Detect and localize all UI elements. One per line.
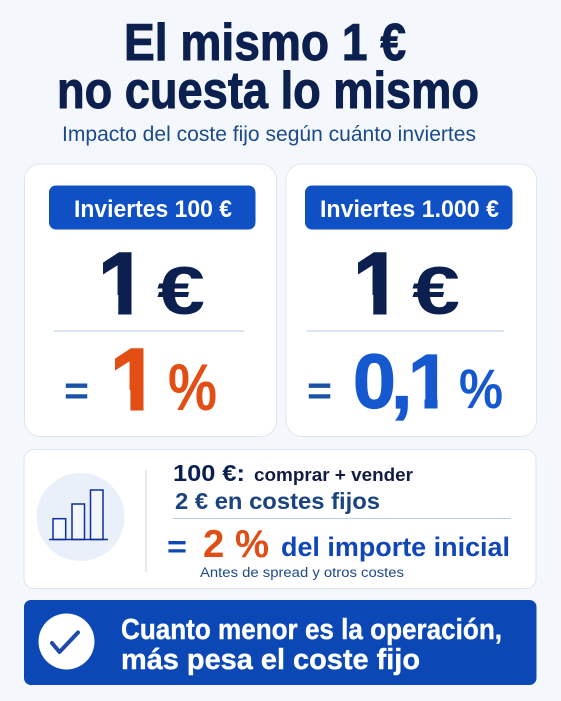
- result: 1 percent: [66, 348, 216, 410]
- title: no cuesta lo mismo: [57, 62, 479, 120]
- badge: invest 1000: [305, 186, 512, 230]
- badge: invest 1000: Inviertes 1.000 €: [320, 196, 499, 223]
- panel: invest 1000: [286, 164, 536, 436]
- text: 100 euros buy and sell: [173, 460, 413, 486]
- result: 1 percent: %: [168, 350, 217, 424]
- amount: 1 euro: 1: [353, 234, 402, 333]
- banner text: [121, 614, 502, 676]
- footnote: Antes de spread y otros costes: [200, 565, 404, 580]
- result: 2 percent of initial amount: del importe inicial: [281, 532, 510, 562]
- amount: 1 euro: [358, 252, 458, 314]
- result: 1 percent: 1: [110, 330, 159, 429]
- panel: invest 100: [24, 164, 276, 436]
- amount: 1 euro: [103, 252, 204, 314]
- banner: conclusion: [24, 600, 536, 685]
- panel: example: [24, 450, 536, 588]
- badge: invest 100: Inviertes 100 €: [74, 196, 232, 223]
- result: 2 percent of initial amount: [167, 523, 510, 566]
- banner text: Cuanto menor es la operación,: [121, 614, 502, 646]
- badge: invest 100: [49, 186, 256, 230]
- title: El mismo 1 €: [124, 14, 406, 72]
- result: 1 percent: =: [64, 369, 89, 413]
- amount: 1 euro: 1: [98, 234, 147, 333]
- amount: 1 euro: €: [157, 253, 205, 329]
- result: 0,1 percent: =: [307, 369, 332, 413]
- text: 2 euros fixed costs: 2 € en costes fijos: [175, 488, 380, 514]
- result: 0,1 percent: %: [459, 357, 503, 420]
- result: 2 percent of initial amount: =: [167, 529, 187, 564]
- result: 0,1 percent: [308, 353, 502, 421]
- result: 2 percent of initial amount: 2 %: [203, 523, 269, 566]
- text: 100 euros buy and sell: 100 €:: [173, 460, 245, 486]
- title: [57, 14, 479, 120]
- text: 100 euros buy and sell: comprar + vender: [254, 465, 413, 485]
- icon: check mark: [38, 614, 94, 670]
- result: 0,1 percent: 1: [408, 339, 451, 425]
- amount: 1 euro: €: [412, 253, 460, 329]
- banner text: más pesa el coste fijo: [121, 644, 420, 676]
- result: 0,1 percent: ,: [391, 339, 412, 425]
- icon: bar chart: [36, 473, 124, 561]
- subtitle: Impacto del coste fijo según cuánto inviertes: [62, 122, 476, 146]
- result: 0,1 percent: 0: [353, 339, 396, 425]
